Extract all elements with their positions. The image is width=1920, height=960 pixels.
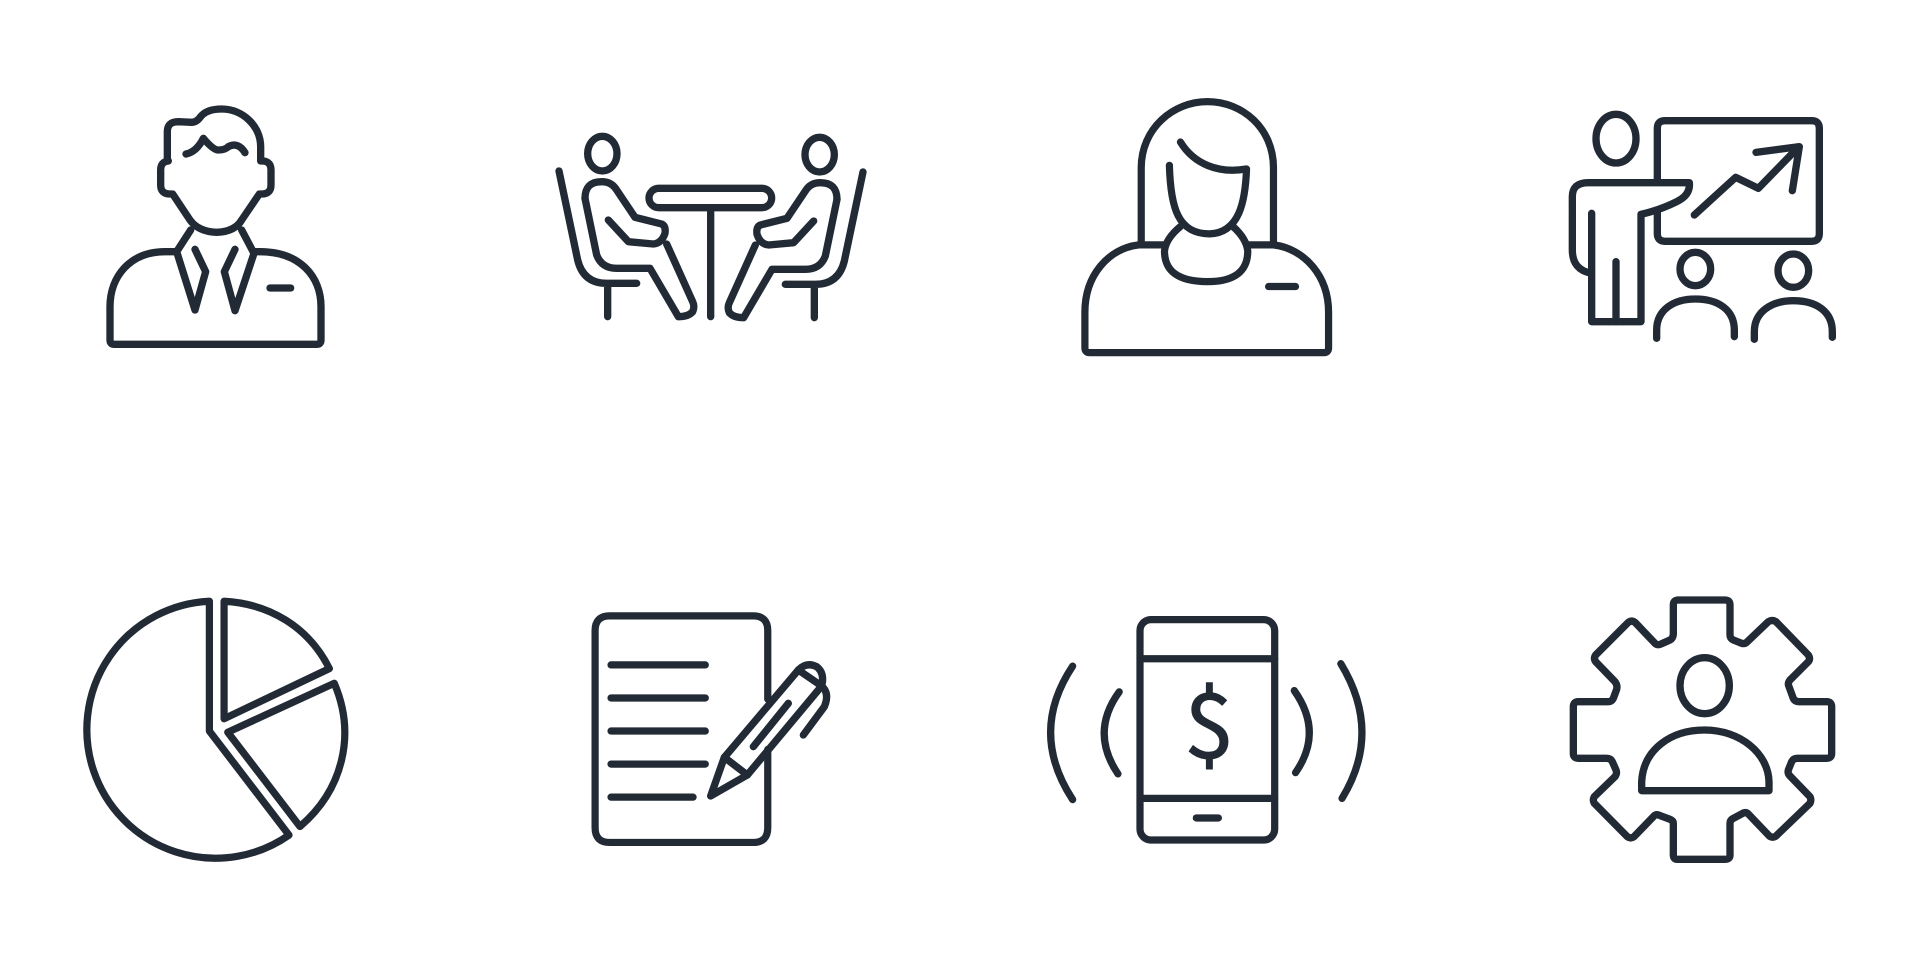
icon: document with pen <box>595 616 827 842</box>
icon: smartphone payment: $ <box>1184 654 1234 784</box>
icon: two people meeting at a table <box>559 136 863 318</box>
icon: presenter with growth chart and audience <box>1572 114 1832 339</box>
icon: businessman <box>110 109 321 344</box>
icon: woman <box>1085 102 1329 353</box>
icon: gear with person <box>1573 600 1832 859</box>
icon: smartphone payment <box>1051 620 1362 840</box>
icon: pie chart <box>87 601 345 858</box>
